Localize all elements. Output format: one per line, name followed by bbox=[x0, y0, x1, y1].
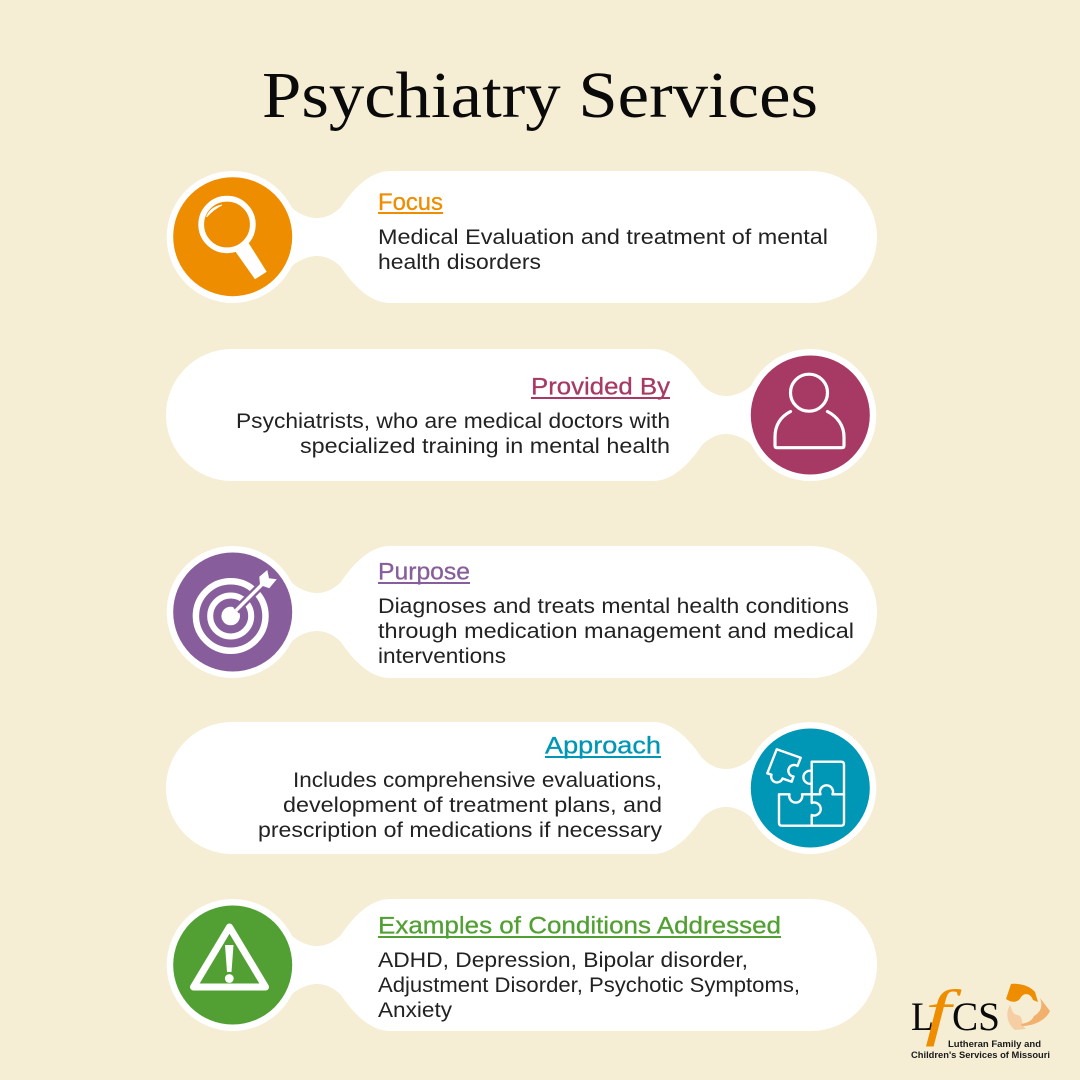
panel: examples of conditions addressed bbox=[167, 899, 877, 1031]
pill shape: focus bbox=[290, 171, 877, 303]
text: examples bbox=[378, 948, 800, 1022]
panel: provided by bbox=[166, 349, 876, 481]
panel: approach bbox=[166, 722, 876, 854]
text: examples: Anxiety bbox=[378, 998, 452, 1022]
text: purpose: through medication management and medical bbox=[378, 619, 854, 643]
panel: purpose bbox=[167, 546, 877, 678]
text: purpose bbox=[378, 594, 854, 668]
pill shape: purpose bbox=[290, 546, 877, 678]
text: focus: Medical Evaluation and treatment of mental bbox=[378, 225, 828, 249]
heading: approach: Approach bbox=[545, 732, 661, 760]
logo letters bbox=[911, 979, 1000, 1047]
logo letters: f bbox=[925, 979, 963, 1047]
logo organisation name: Children's Services of Missouri bbox=[911, 1050, 1050, 1061]
panel: focus bbox=[167, 171, 877, 303]
logo: LFCS bbox=[911, 979, 1050, 1061]
pill shape: approach bbox=[166, 722, 753, 854]
icon: person bbox=[744, 349, 876, 481]
heading: purpose: Purpose bbox=[378, 558, 470, 586]
icon: magnifying glass bbox=[167, 171, 299, 303]
text: provided by bbox=[236, 409, 670, 458]
text: examples: Adjustment Disorder, Psychotic Symptoms, bbox=[378, 973, 800, 997]
logo organisation name: Lutheran Family and bbox=[948, 1039, 1041, 1050]
logo organisation name bbox=[911, 1039, 1050, 1061]
text: purpose: Diagnoses and treats mental health conditions bbox=[378, 594, 849, 618]
text: purpose: interventions bbox=[378, 644, 506, 668]
text: approach: prescription of medications if necessary bbox=[258, 818, 662, 842]
text: approach bbox=[258, 768, 662, 842]
pill shape: examples bbox=[290, 899, 877, 1031]
icon: target with arrow bbox=[167, 546, 299, 678]
logo letters: CS bbox=[952, 994, 1000, 1039]
heading: provided by: Provided By bbox=[531, 374, 670, 400]
logo letters: L bbox=[911, 994, 934, 1039]
title: Psychiatry Services bbox=[262, 59, 818, 132]
text: provided by: specialized training in mental health bbox=[300, 434, 670, 458]
logo mark: three arrows bbox=[1006, 984, 1050, 1030]
heading: focus: Focus bbox=[378, 189, 443, 216]
text: approach: development of treatment plans, and bbox=[283, 793, 662, 817]
heading: examples: Examples of Conditions Addressed bbox=[378, 912, 781, 940]
icon: warning triangle bbox=[167, 899, 299, 1031]
text: examples: ADHD, Depression, Bipolar disorder, bbox=[378, 948, 748, 972]
text: provided by: Psychiatrists, who are medical doctors with bbox=[236, 409, 670, 433]
text: approach: Includes comprehensive evaluations, bbox=[293, 768, 662, 792]
text: focus: health disorders bbox=[378, 250, 541, 274]
pill shape: provided by bbox=[166, 349, 753, 481]
text: focus bbox=[378, 225, 828, 274]
icon: puzzle pieces bbox=[744, 722, 876, 854]
